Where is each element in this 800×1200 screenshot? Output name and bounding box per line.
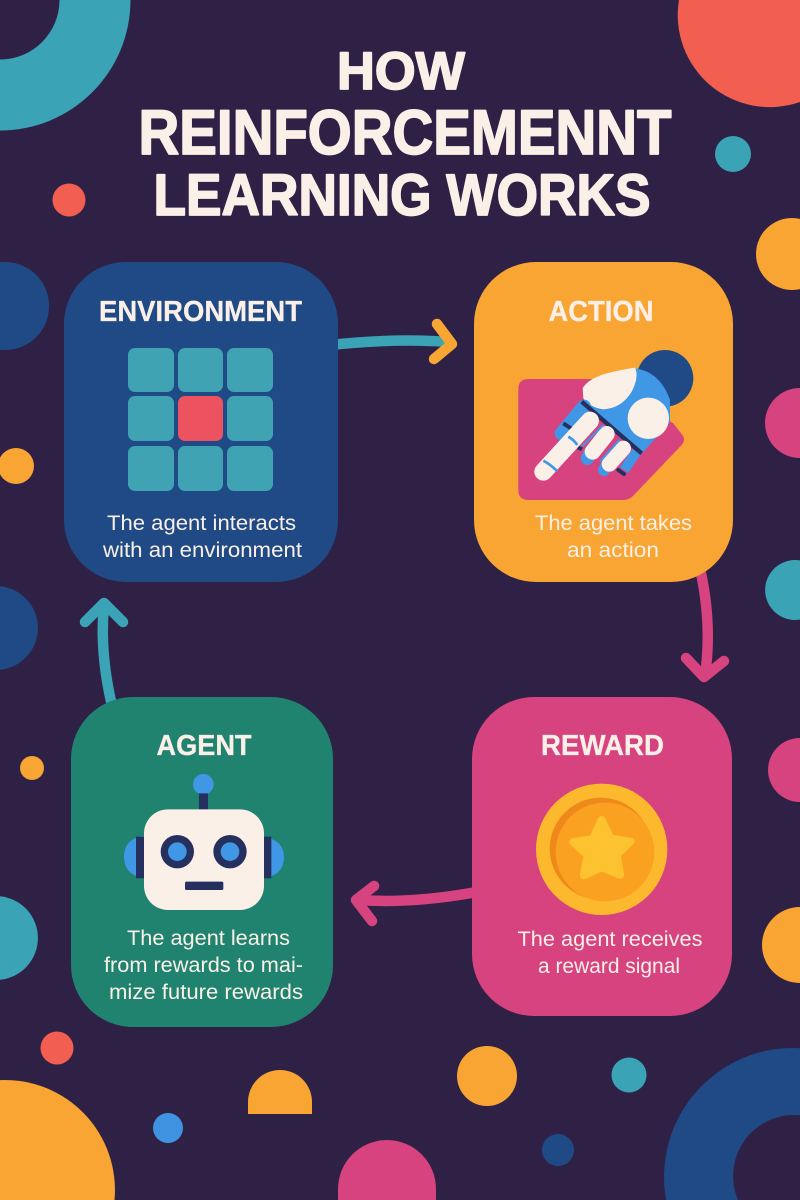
heading: environment: ENVIRONMENT bbox=[99, 296, 302, 328]
panel: environment bbox=[64, 262, 338, 582]
text: agent description: from rewards to mai- bbox=[104, 954, 303, 977]
arrow: agent to environment bbox=[85, 603, 123, 714]
palm bbox=[582, 368, 670, 454]
text: environment description bbox=[102, 512, 302, 562]
text: action description bbox=[535, 512, 692, 562]
text: agent description: The agent learns bbox=[127, 927, 290, 950]
text: agent description: mize future rewards bbox=[109, 981, 303, 1004]
heading: action: ACTION bbox=[548, 296, 654, 328]
text: reward description bbox=[518, 928, 702, 978]
panel: reward bbox=[472, 697, 732, 1016]
title: HOW bbox=[337, 42, 465, 101]
text: environment description: The agent interacts bbox=[107, 512, 296, 535]
text: reward description: a reward signal bbox=[538, 955, 680, 978]
arrow: reward to agent bbox=[356, 886, 482, 921]
text: action description: an action bbox=[567, 539, 659, 562]
text: action description: The agent takes bbox=[535, 512, 692, 535]
icon: gold coin with star bbox=[536, 784, 667, 915]
panel: agent bbox=[71, 697, 333, 1027]
arrow: action to reward bbox=[686, 560, 724, 677]
text: environment description: with an environment bbox=[102, 539, 302, 562]
fingers back bbox=[562, 407, 637, 474]
icon: robot head bbox=[124, 774, 284, 910]
fingers front bbox=[543, 421, 623, 472]
title: REINFORCEMENNT bbox=[138, 98, 672, 168]
text: reward description: The agent receives bbox=[518, 928, 702, 951]
icon: robot hand pointing bbox=[518, 350, 693, 500]
heading: reward: REWARD bbox=[541, 730, 664, 762]
panel: action bbox=[474, 262, 733, 582]
heading: agent: AGENT bbox=[156, 730, 252, 762]
text: agent description bbox=[104, 927, 303, 1004]
arrow: environment to action bbox=[330, 324, 452, 359]
title bbox=[138, 42, 672, 228]
title: LEARNING WORKS bbox=[154, 163, 650, 228]
icon: grid world bbox=[128, 348, 273, 491]
